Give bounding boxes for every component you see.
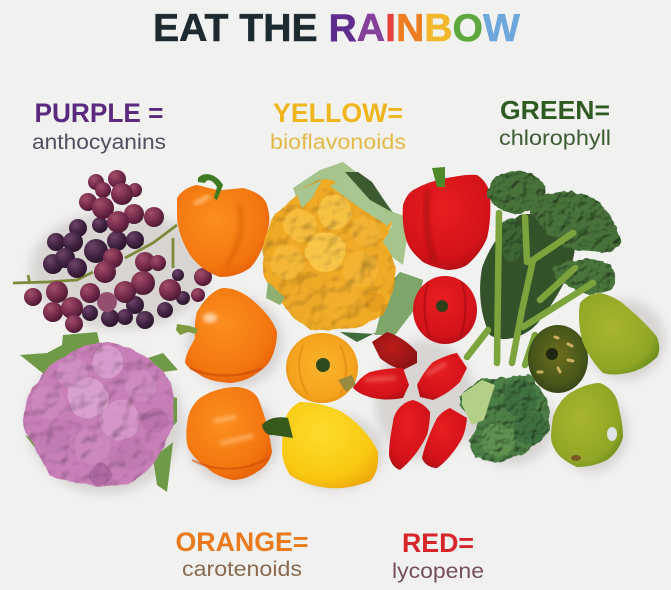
purple cauliflower <box>20 332 178 492</box>
label: orange: carotenoids <box>182 558 302 581</box>
small red peppers <box>353 332 467 470</box>
label: purple <box>32 98 166 154</box>
green tomato <box>528 325 588 393</box>
label: red: RED= <box>402 528 474 558</box>
label: purple: PURPLE = <box>34 98 164 128</box>
orange pepper top <box>177 174 269 277</box>
title: EAT THE RAINBOW <box>153 7 521 50</box>
yellow cauliflower front leaves <box>296 178 393 226</box>
label: red: lycopene <box>392 560 484 583</box>
yellow pepper <box>262 402 378 488</box>
broccolini <box>467 171 621 365</box>
pear top <box>579 293 659 374</box>
label: yellow <box>270 98 406 154</box>
label: purple: anthocyanins <box>32 131 166 154</box>
grapes <box>13 170 212 333</box>
cauliflower leaves <box>20 332 178 492</box>
red tomato <box>413 276 477 344</box>
label: green: GREEN= <box>500 95 610 125</box>
label: yellow: YELLOW= <box>273 98 403 128</box>
red pepper large <box>403 167 490 270</box>
pear bottom <box>551 383 623 467</box>
orange pepper bottom <box>186 387 272 480</box>
yellow tomato <box>286 333 358 403</box>
yellow cauliflower back leaves <box>293 162 410 265</box>
food shadows <box>27 210 665 494</box>
florets <box>488 171 621 293</box>
broccoli head <box>460 375 550 463</box>
label: green <box>499 95 611 150</box>
dark leaves <box>480 214 575 339</box>
orange pepper middle <box>176 288 277 383</box>
yellow cauliflower <box>262 162 423 342</box>
stems <box>467 213 593 365</box>
label: orange <box>176 527 308 581</box>
grape stems <box>13 225 177 284</box>
label: red <box>392 528 484 583</box>
label: orange: ORANGE= <box>176 527 308 557</box>
label: green: chlorophyll <box>499 127 611 150</box>
label: yellow: bioflavonoids <box>270 131 406 154</box>
